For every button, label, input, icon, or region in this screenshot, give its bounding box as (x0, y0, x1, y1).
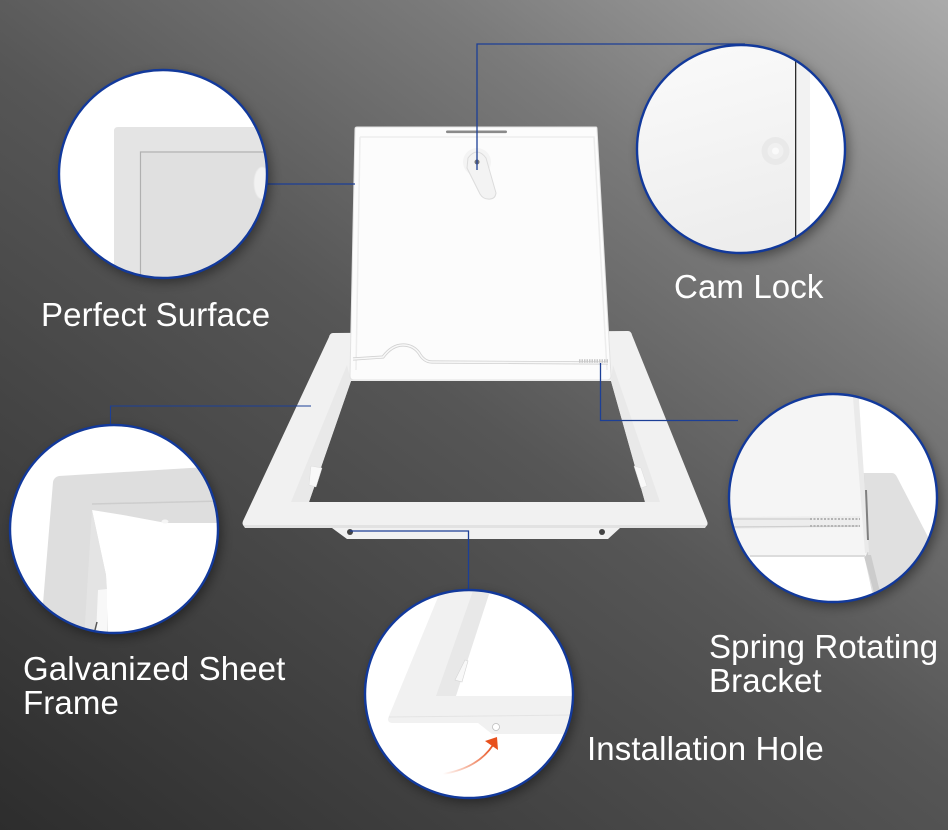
label: spring rotating bracket: Spring Rotating (709, 628, 938, 665)
label: perfect surface: Perfect Surface (41, 296, 270, 333)
circle: installation hole detail (365, 585, 578, 798)
label: galvanized sheet frame (23, 650, 285, 721)
label: spring rotating bracket: Bracket (709, 662, 822, 699)
label: installation hole: Installation Hole (587, 730, 824, 767)
icon: lock rivet (762, 137, 790, 165)
frame (242, 331, 708, 539)
cam latch (463, 148, 496, 199)
product: open access panel (242, 127, 708, 539)
leader line: spring rotating bracket (600, 363, 738, 420)
label: galvanized sheet frame: Frame (23, 684, 119, 721)
circle: perfect surface detail (59, 70, 271, 290)
spring rod (353, 345, 608, 363)
circle: cam lock detail (635, 40, 850, 260)
label: galvanized sheet frame: Galvanized Sheet (23, 650, 285, 687)
circle: spring rotating bracket detail (725, 385, 940, 602)
label: cam lock: Cam Lock (674, 268, 824, 305)
door panel (350, 127, 611, 380)
leader line: galvanized sheet frame (110, 406, 311, 427)
label: spring rotating bracket (709, 628, 938, 699)
leader line: installation hole (350, 531, 468, 592)
leader line: cam lock (477, 44, 745, 170)
leader line: perfect surface (265, 183, 355, 185)
arrow: pointing to hole (443, 737, 498, 774)
circle: galvanized frame detail (10, 425, 222, 640)
